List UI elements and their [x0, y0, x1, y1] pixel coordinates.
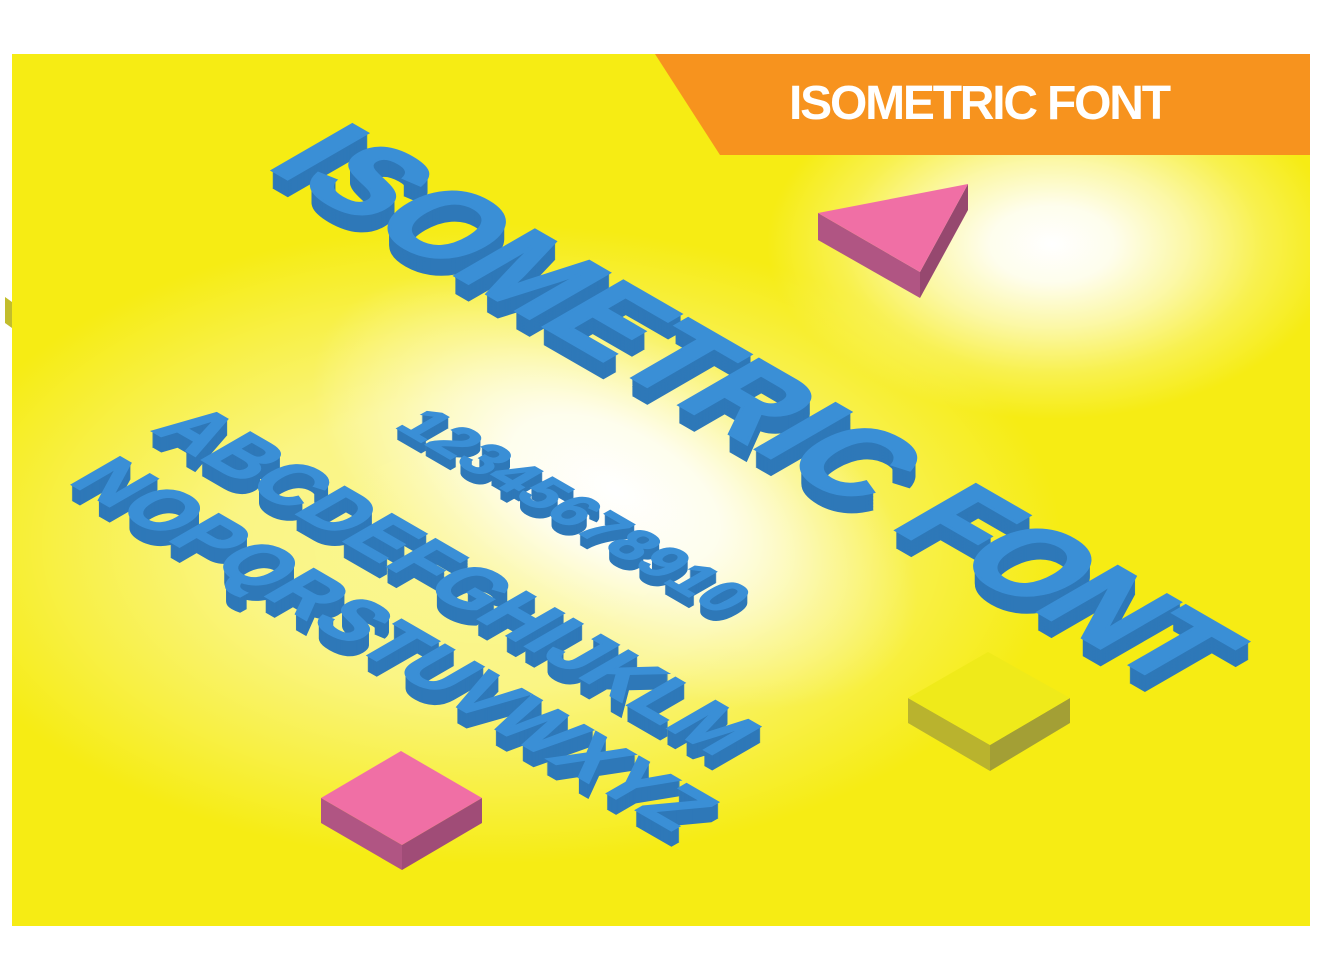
- icon: pink square block: [321, 751, 482, 870]
- isometric title: ISOMETRIC FONT: [240, 106, 1271, 701]
- orange banner: [655, 54, 1310, 155]
- isometric alphabet row A to M: ABCDEFGHIJKLM: [135, 394, 779, 766]
- banner heading: ISOMETRIC FONT: [789, 77, 1169, 130]
- tilted white glow behind the numbers: [241, 181, 989, 799]
- icon: pink triangular prism: [818, 184, 968, 298]
- small clipped block at left edge: [5, 297, 12, 328]
- icon: yellow square block: [908, 652, 1070, 771]
- isometric numbers row: 12345678910: [382, 400, 768, 622]
- isometric alphabet row N to Z: NOPQRSTUVWXYZ: [52, 446, 736, 841]
